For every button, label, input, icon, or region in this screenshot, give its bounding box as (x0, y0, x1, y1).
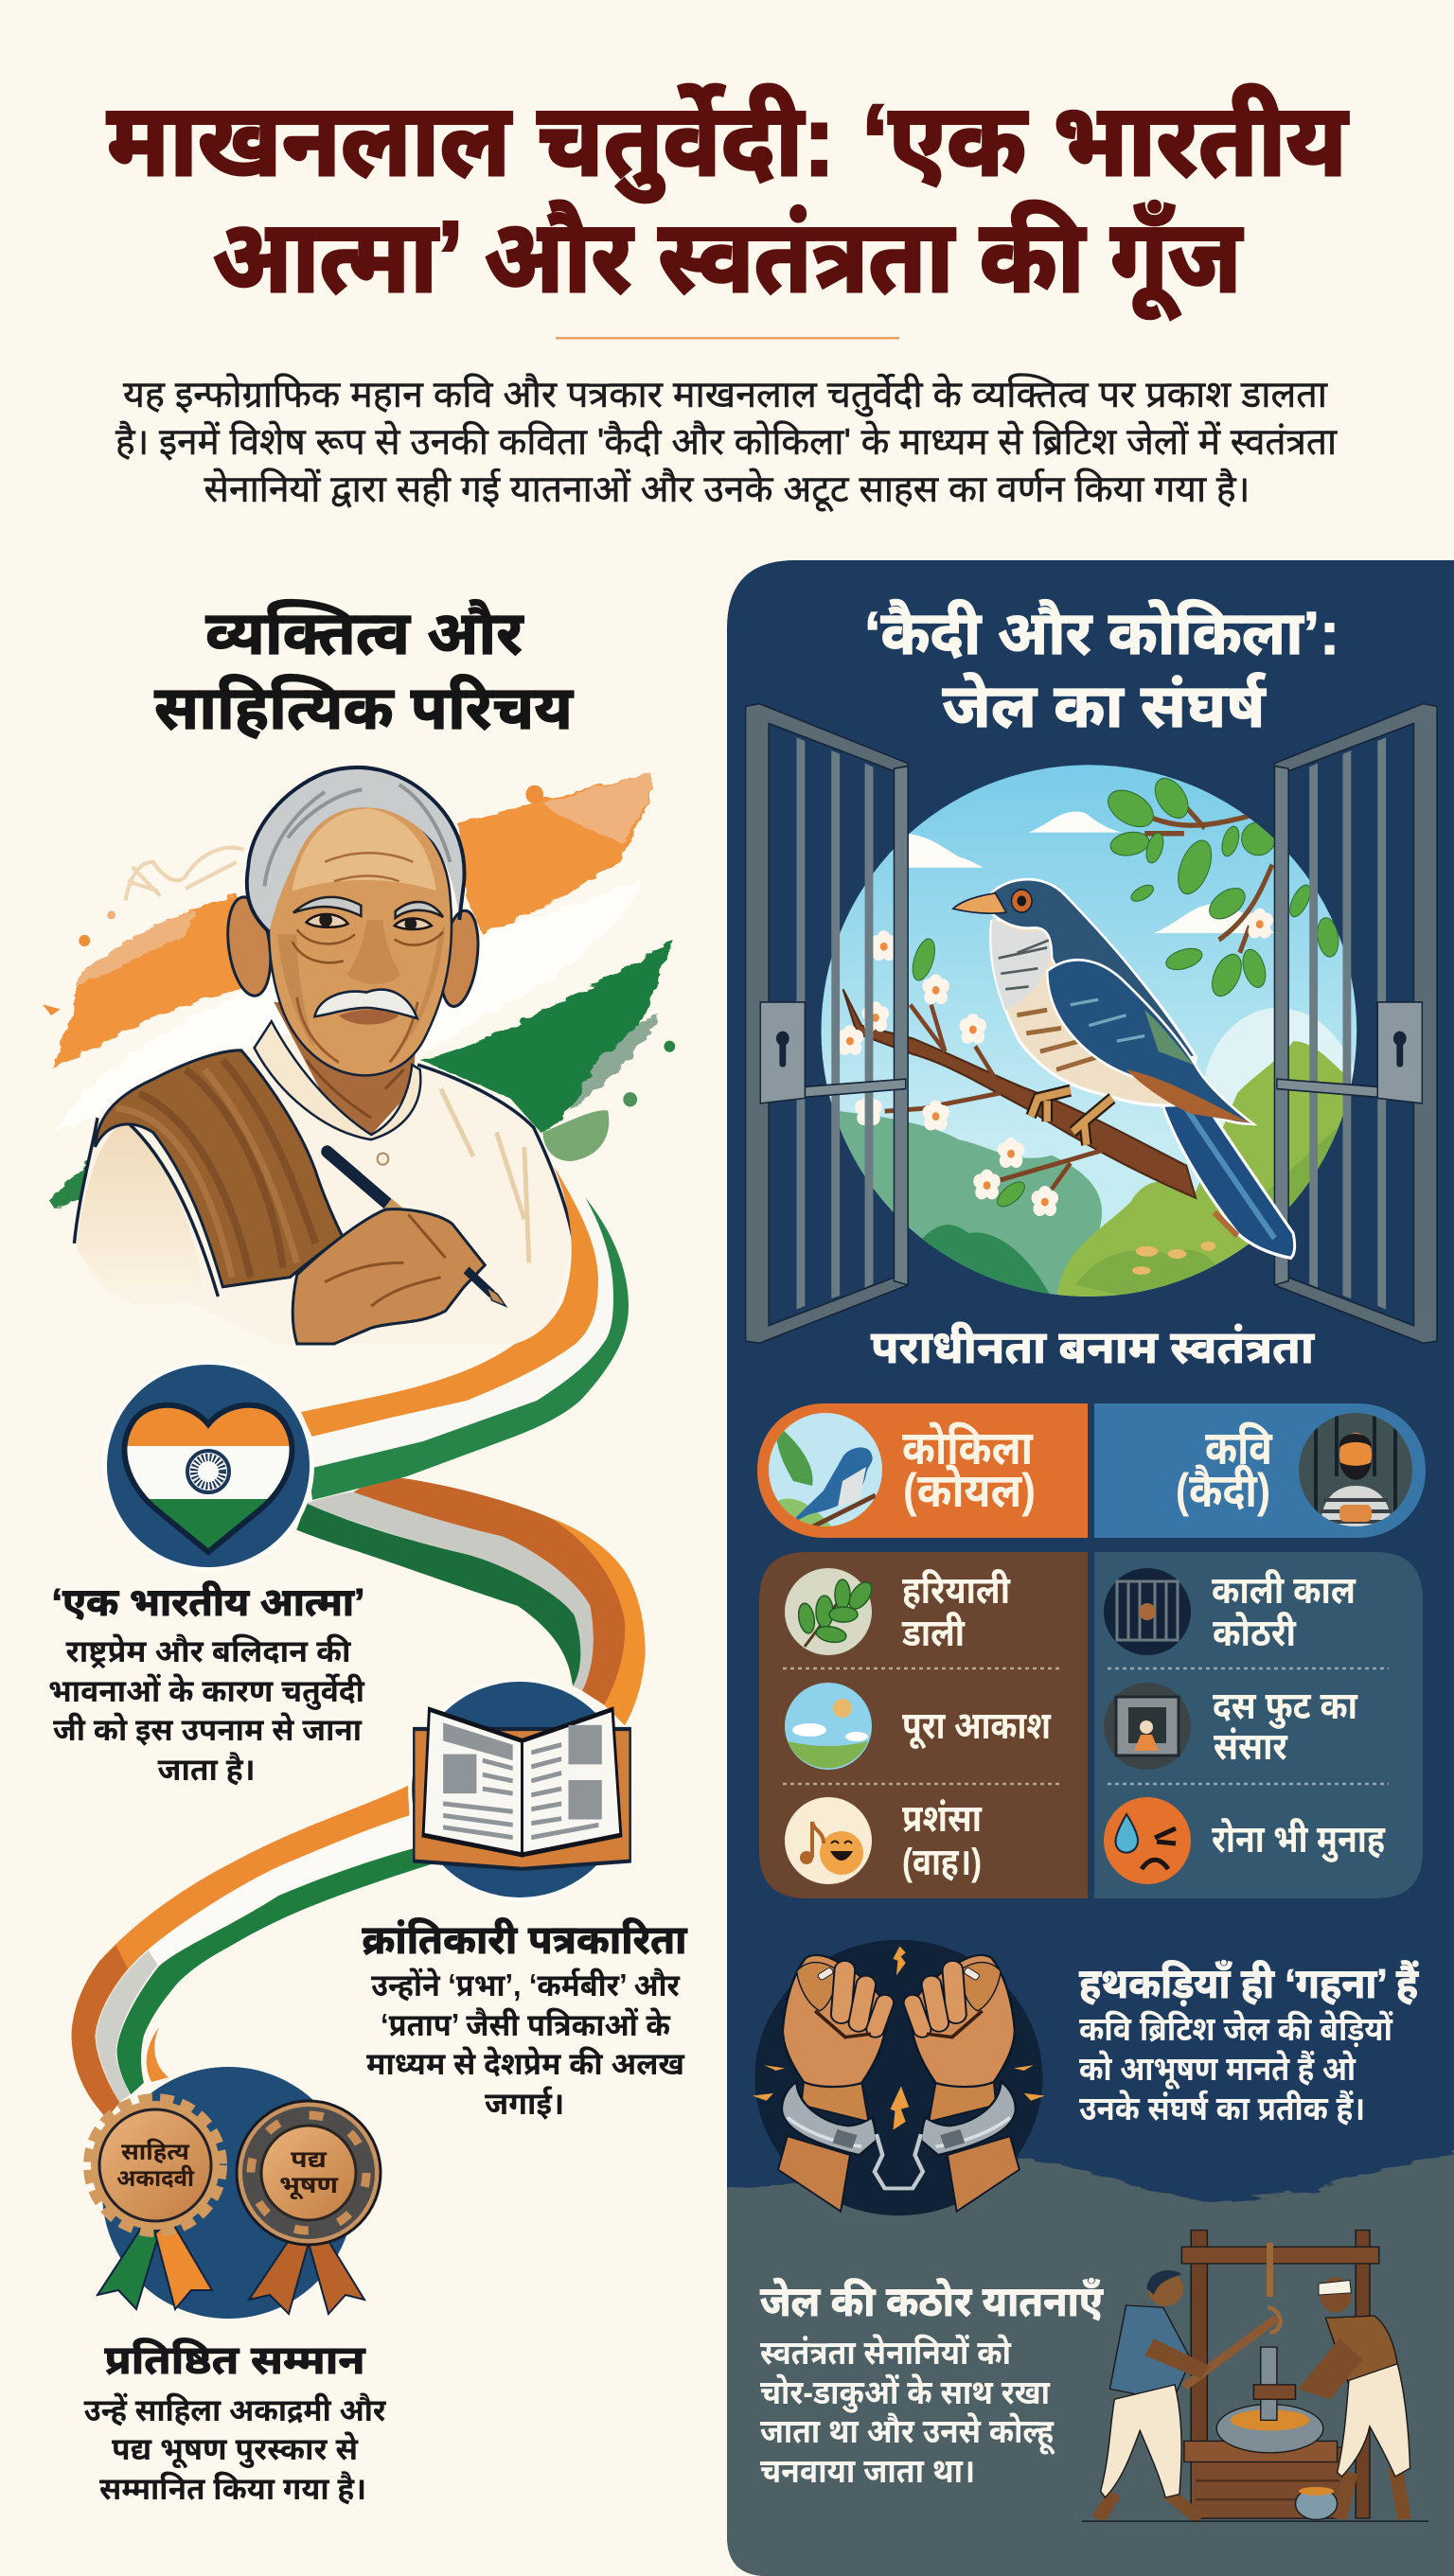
ribbon: heart to book (296, 1478, 646, 1725)
text: harsh jail tortures: स्वतंत्रता सेनानियों को (760, 2334, 1012, 2372)
icon: award medals (90, 2067, 381, 2319)
panel: prisoner hardships (1094, 1552, 1423, 1898)
portrait of the poet with tricolour brush strokes (43, 768, 675, 1344)
text: harsh jail tortures: जेल की कठोर यातनाएँ (760, 2277, 1104, 2325)
icon: green branch (785, 1568, 877, 1655)
title divider (556, 337, 899, 339)
ears (222, 894, 484, 1009)
left prisoner (1098, 2270, 1210, 2519)
header bar: cuckoo: कोकिला (902, 1421, 1034, 1474)
pen (328, 1152, 400, 1214)
icon: crying face (1104, 1797, 1191, 1884)
header bar: poet (1094, 1403, 1426, 1538)
icon: small cuckoo (767, 1410, 885, 1528)
left heading (154, 599, 574, 742)
illustration: prisoners at the oil press (1082, 2231, 1428, 2521)
text: krantikari patrakarita: जगाई। (485, 2086, 564, 2121)
shawl (95, 1050, 343, 1287)
header bar: poet: कवि (1205, 1421, 1273, 1474)
icon: ten foot cell (1104, 1683, 1191, 1770)
text: krantikari patrakarita: उन्होंने ‘प्रभा’, ‘कर्मबीर’ और (371, 1967, 681, 2003)
left heading: साहित्यिक परिचय (154, 674, 574, 742)
panel lower section (682, 2134, 1454, 2576)
text: handcuffs are ornaments (1079, 1959, 1419, 2127)
title (107, 83, 1349, 321)
icon: dark cell (1104, 1568, 1191, 1655)
intro paragraph: सेनानियों द्वारा सही गई यातनाओं और उनके अटूट साहस का वर्णन किया गया है। (204, 468, 1250, 512)
right gate (1274, 704, 1437, 1343)
subheading: dependence vs freedom: पराधीनता बनाम स्वतंत्रता (871, 1322, 1315, 1373)
icon: heart with flag (102, 1360, 314, 1572)
icon: open newspaper book (408, 1678, 631, 1901)
text: krantikari patrakarita: ‘प्रताप’ जैसी पत्रिकाओं के (381, 2006, 671, 2042)
text: pratishthit samman: उन्हें साहिला अकाद्रमी और (83, 2392, 387, 2427)
ribbon: portrait to heart (301, 1166, 629, 1500)
small ribbon sliver (147, 2027, 168, 2082)
oil pot (1295, 2487, 1338, 2519)
intro paragraph: यह इन्फोग्राफिक महान कवि और पत्रकार माखनलाल चतुर्वेदी के व्यक्तित्व पर प्रकाश डालता (123, 374, 1328, 416)
panel: prisoner and cuckoo (682, 560, 1454, 2576)
cuckoo (953, 879, 1295, 1258)
text: krantikari patrakarita: माध्यम से देशप्रेम की अलख (366, 2045, 685, 2081)
text: pratishthit samman: प्रतिष्ठित सम्मान (104, 2338, 366, 2382)
text: ek bharatiya aatma: ‘एक भारतीय आत्मा’ (51, 1580, 365, 1624)
text: pratishthit samman: सम्मानित किया गया है। (99, 2470, 366, 2506)
right heading: जेल का संघर्ष (943, 672, 1267, 740)
icon: fists in handcuffs (753, 1940, 1045, 2215)
left heading: व्यक्तित्व और (204, 599, 524, 667)
header bar: cuckoo (757, 1403, 1088, 1538)
right heading: ‘कैदी और कोकिला’: (864, 599, 1339, 667)
tricolour brush strokes (43, 772, 675, 1209)
medal: padma bhushan: भूषण (279, 2172, 339, 2200)
panel: prisoner hardships: कोठरी (1213, 1612, 1297, 1654)
text: handcuffs are ornaments: उनके संघर्ष का प्रतीक हैं। (1079, 2090, 1365, 2127)
text: harsh jail tortures: चनवाया जाता था। (760, 2453, 975, 2490)
right prisoner (1298, 2277, 1410, 2519)
title: आत्मा’ और स्वतंत्रता की गूँज (212, 200, 1243, 321)
medal: sahitya akademi: साहित्य (121, 2138, 190, 2165)
title: माखनलाल चतुर्वेदी: ‘एक भारतीय (107, 83, 1349, 203)
text: krantikari patrakarita: क्रांतिकारी पत्रकारिता (362, 1917, 687, 1962)
medal: padma bhushan (237, 2101, 381, 2314)
left gate (746, 704, 908, 1343)
panel: cuckoo freedoms (759, 1552, 1088, 1898)
text: ek bharatiya aatma: जाता है। (157, 1751, 256, 1787)
panel: prisoner hardships: काली काल (1212, 1569, 1356, 1612)
hair (247, 768, 465, 932)
lips (339, 1010, 399, 1025)
neck and collar (255, 1002, 420, 1165)
text: handcuffs are ornaments: को आभूषण मानते हैं ओ (1079, 2050, 1356, 2090)
panel: cuckoo freedoms: प्रशंसा (902, 1798, 983, 1840)
text: krantikari patrakarita (362, 1917, 687, 2121)
panel: prisoner hardships: रोना भी मुनाह (1212, 1818, 1386, 1862)
header bar: poet: (कैदी) (1176, 1464, 1270, 1517)
medal: sahitya akademi: अकादवी (116, 2164, 195, 2192)
face (269, 802, 452, 1075)
intro paragraph: है। इनमें विशेष रूप से उनकी कविता 'कैदी और कोकिला' के माध्यम से ब्रिटिश जेलों में स्वतंत्रता (115, 421, 1338, 463)
panel: prisoner hardships: संसार (1214, 1726, 1288, 1768)
icon: music and smile (785, 1797, 872, 1884)
text: harsh jail tortures (760, 2277, 1104, 2490)
kurta (74, 1031, 573, 1344)
writing hand (293, 1209, 505, 1344)
illustration: cuckoo through open prison gates (746, 704, 1437, 1343)
panel: cuckoo freedoms: पूरा आकाश (902, 1705, 1052, 1749)
text: pratishthit samman: पद्य भूषण पुरस्कार से (112, 2430, 359, 2469)
text: ek bharatiya aatma (48, 1580, 365, 1787)
text: ek bharatiya aatma: जी को इस उपनाम से जाना (53, 1711, 363, 1747)
text: handcuffs are ornaments: कवि ब्रिटिश जेल की बेड़ियों (1079, 2010, 1393, 2048)
panel: cuckoo freedoms: हरियाली (902, 1569, 1011, 1612)
sky scene (820, 761, 1363, 1300)
text: ek bharatiya aatma: राष्ट्रप्रेम और बलिदान की (66, 1632, 352, 1669)
ribbon: book to medals (72, 1786, 436, 2118)
text: harsh jail tortures: जाता था और उनसे कोल्हू (760, 2412, 1055, 2455)
header bar: cuckoo: (कोयल) (903, 1464, 1036, 1517)
intro paragraph (115, 374, 1338, 512)
moustache (314, 990, 417, 1018)
panel: cuckoo freedoms: (वाह।) (902, 1842, 982, 1883)
blossom branch (837, 930, 1196, 1216)
panel: cuckoo freedoms: डाली (901, 1612, 966, 1654)
medal: padma bhushan: पद्य (291, 2146, 328, 2173)
icon: prisoner poet (1297, 1410, 1415, 1528)
text: handcuffs are ornaments: हथकड़ियाँ ही ‘गहना’ हैं (1079, 1959, 1419, 2007)
text: harsh jail tortures: चोर-डाकुओं के साथ रखा (760, 2373, 1051, 2413)
tree branch and leaves top right (909, 771, 1341, 1211)
panel: prisoner hardships: दस फुट का (1213, 1685, 1358, 1729)
right heading (864, 599, 1339, 740)
text: ek bharatiya aatma: भावनाओं के कारण चतुर्वेदी (48, 1672, 365, 1711)
text: pratishthit samman (83, 2338, 387, 2506)
icon: sky (785, 1683, 872, 1770)
medal: sahitya akademi (90, 2100, 221, 2309)
